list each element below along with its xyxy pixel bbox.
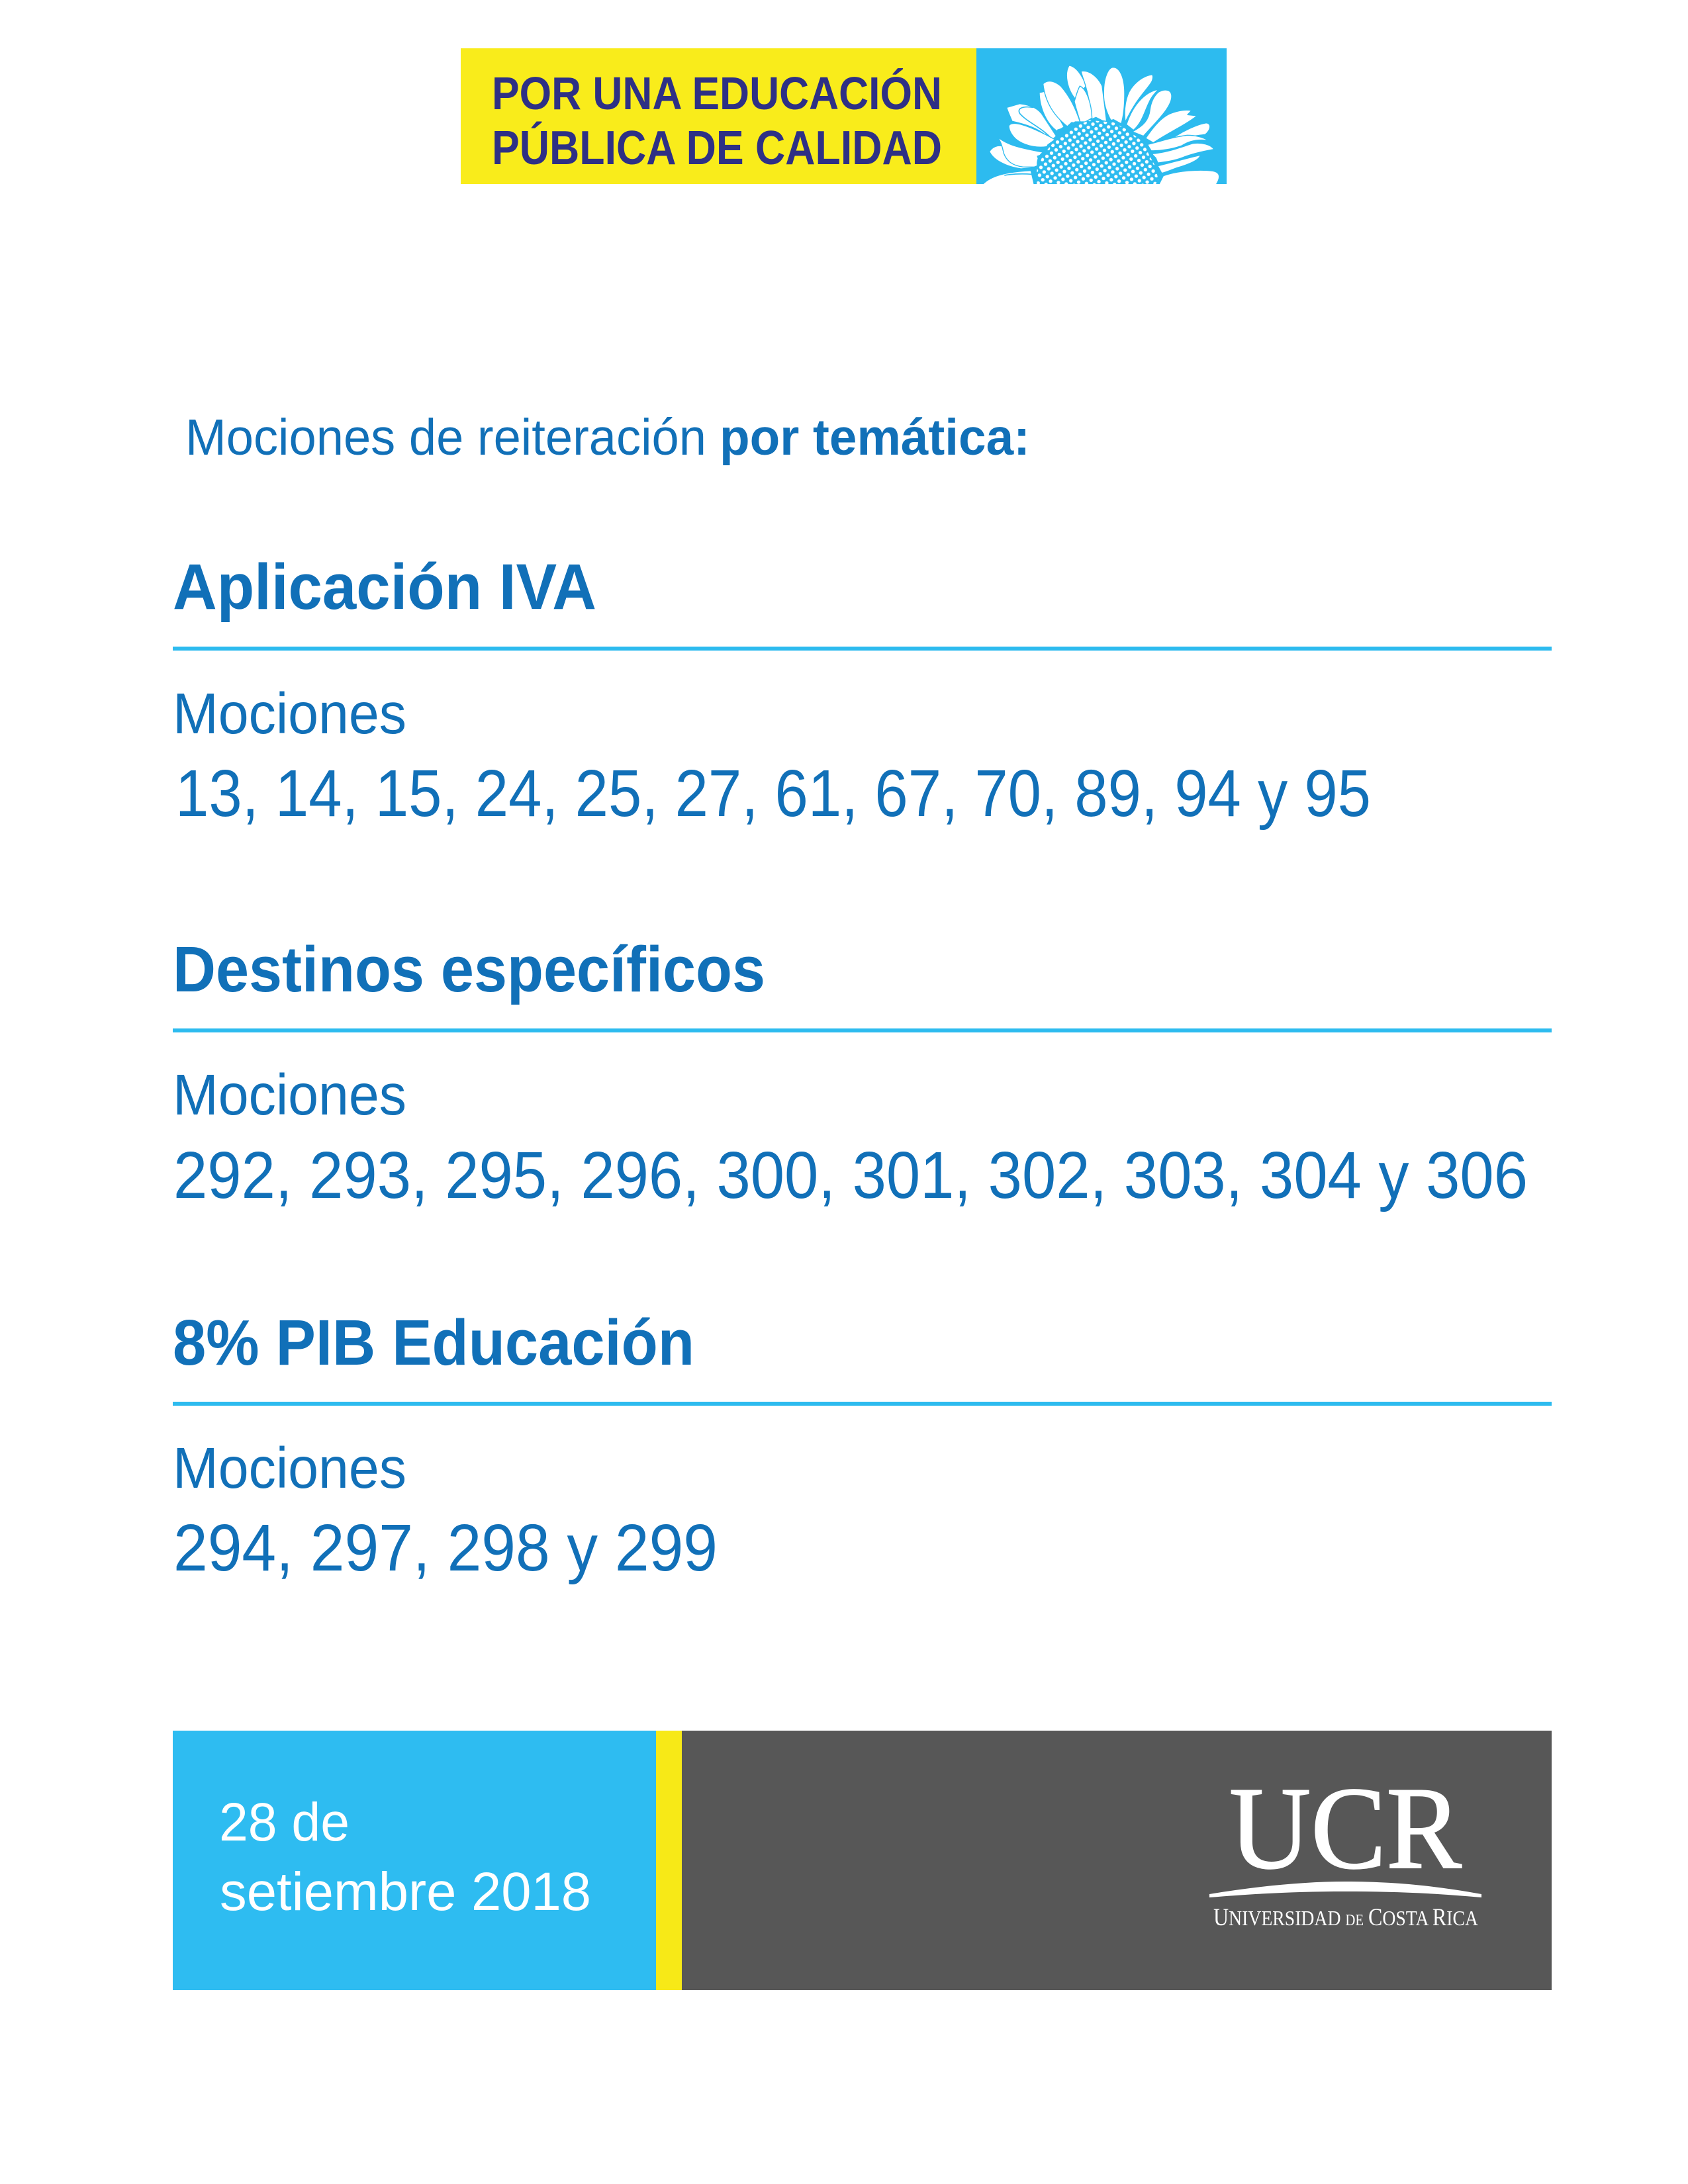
section title: Aplicación IVA (173, 551, 596, 623)
section: 8% PIB Educación (173, 1306, 1552, 1585)
main heading (185, 409, 1030, 466)
banner (461, 48, 1227, 185)
mociones label: Mociones (173, 1436, 406, 1500)
infographic canvas (173, 48, 1552, 1990)
motion numbers: 294, 297, 298 y 299 (173, 1511, 718, 1585)
section title: 8% PIB Educación (173, 1306, 694, 1379)
main heading: por temática: (720, 409, 1030, 466)
motion numbers: 292, 293, 295, 296, 300, 301, 302, 303, 304 y 306 (173, 1138, 1528, 1212)
banner yellow slogan panel (461, 48, 976, 184)
main heading: Mociones de reiteración (185, 409, 706, 466)
banner yellow slogan panel: POR UNA EDUCACIÓN (492, 68, 942, 119)
banner yellow slogan panel: PÚBLICA DE CALIDAD (492, 121, 942, 175)
date panel: setiembre 2018 (220, 1862, 591, 1922)
UCR logo panel: UNIVERSIDAD DE COSTA RICA (1213, 1904, 1478, 1931)
section title: Destinos específicos (173, 933, 765, 1005)
mociones label: Mociones (173, 1063, 406, 1127)
date panel (173, 1731, 656, 1990)
motion numbers: 13, 14, 15, 24, 25, 27, 61, 67, 70, 89, 94 y 95 (175, 756, 1371, 831)
UCR logo panel (682, 1731, 1552, 1990)
banner blue panel with sunflower icon (976, 48, 1227, 185)
section: Destinos específicos (173, 933, 1552, 1212)
mociones label: Mociones (173, 682, 406, 746)
section: Aplicación IVA (173, 551, 1552, 831)
date panel: 28 de (219, 1792, 350, 1852)
footer band (173, 1731, 1552, 1990)
UCR logo panel: UCR (1229, 1762, 1462, 1893)
